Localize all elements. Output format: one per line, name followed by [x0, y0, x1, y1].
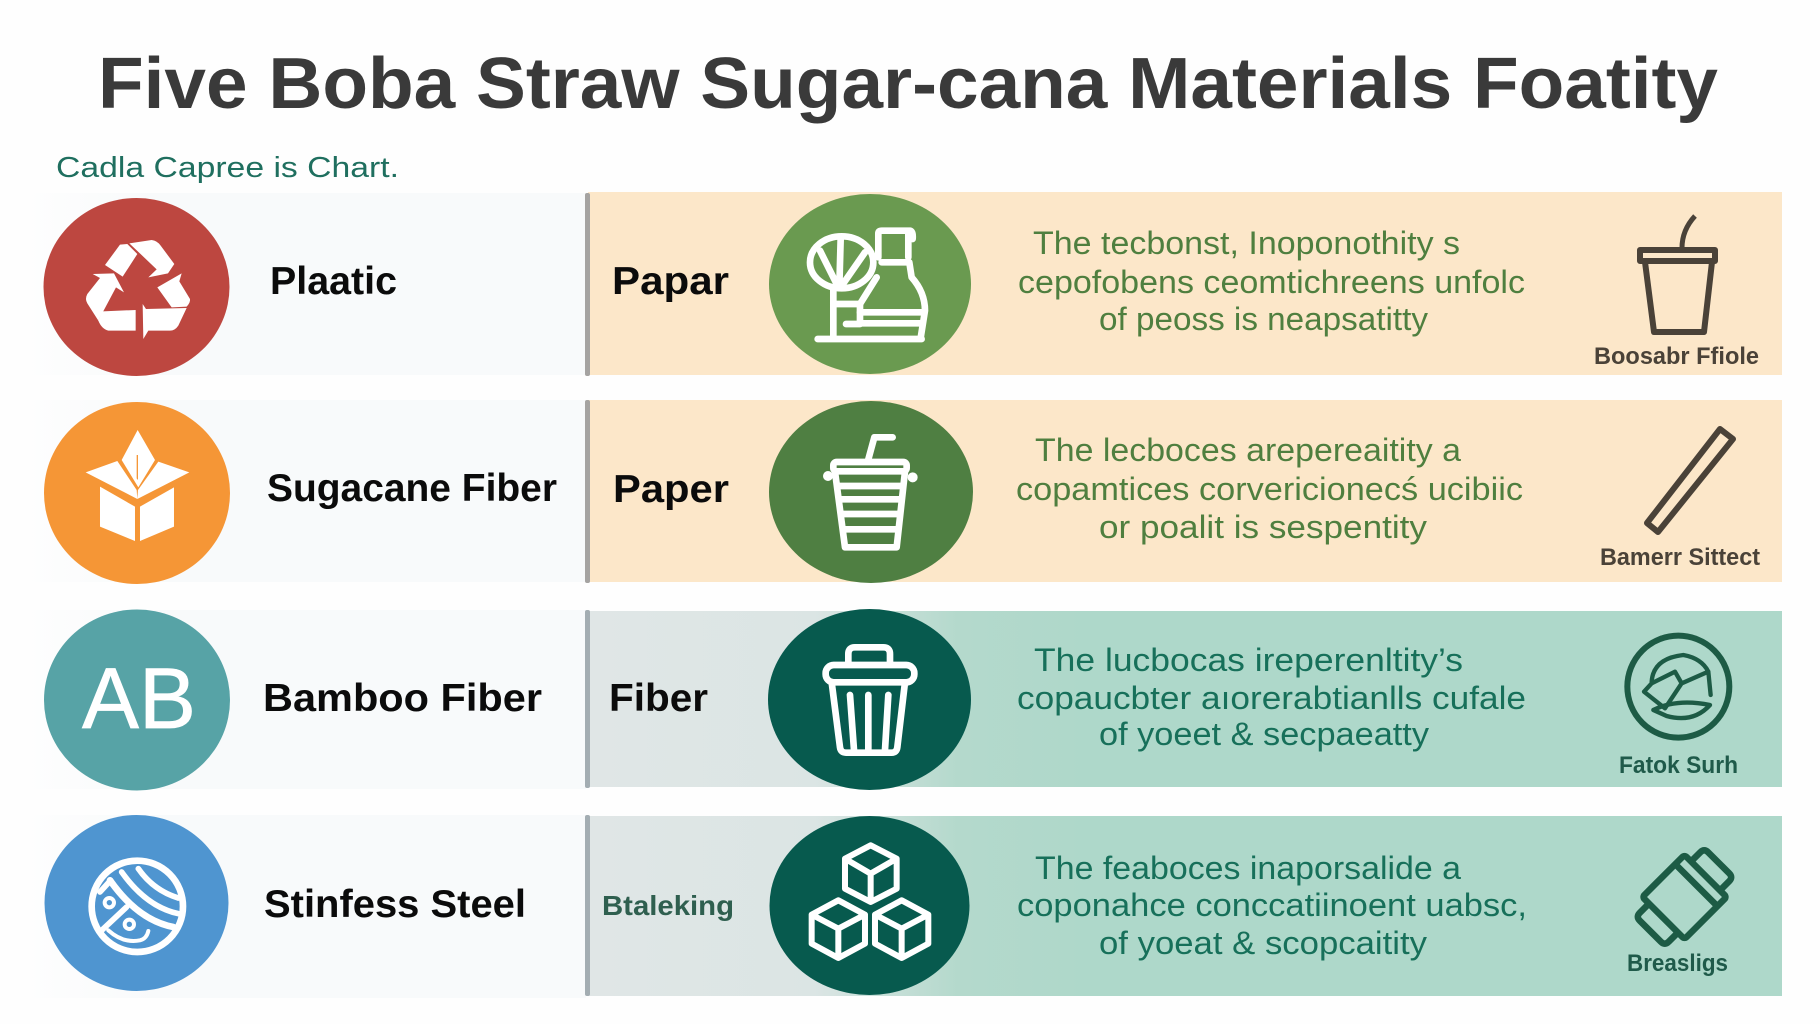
description text [1017, 642, 1526, 752]
description text: or poalit is sespentity [1099, 509, 1427, 545]
row 3 left panel [20, 610, 586, 789]
description text [1017, 850, 1527, 961]
description text: of peoss is neapsatitty [1099, 301, 1428, 337]
description text: of yoeet & secpaeatty [1099, 716, 1429, 752]
icon: cup with straw [1640, 216, 1715, 332]
material label: Sugacane Fiber: Sugacane Fiber [267, 467, 557, 510]
icon: leaf badge [1627, 636, 1729, 738]
description text: coponahce conccatiinoent uabsc, [1017, 887, 1527, 923]
description text: copamtices corvericionecś ucibiic [1016, 471, 1523, 507]
row 3 right panel [588, 611, 1782, 787]
row 4: stainless steel [20, 815, 1782, 998]
type label: Paper: Paper [613, 468, 729, 511]
icon: drink cup in green circle [769, 401, 973, 583]
description text: The lucbocas ireperenltity’s [1034, 642, 1463, 678]
description text [1018, 225, 1525, 337]
icon: straw [1647, 429, 1733, 532]
row 4 divider [585, 815, 590, 996]
material label: Bamboo Fiber: Bamboo Fiber [263, 677, 542, 720]
type label: Papar: Papar [612, 260, 729, 303]
row 2: sugarcane fiber and paper [20, 400, 1782, 584]
description text: The feaboces inaporsalide a [1035, 850, 1461, 886]
icon: AB in teal circle: AB [82, 651, 196, 747]
icon: wrapped bundle [1629, 842, 1740, 952]
material label: Plaatic: Plaatic [270, 260, 397, 303]
description text: copaucbter aıorerabtianlls cufale [1017, 680, 1526, 716]
title: Five Boba Straw Sugar-cana Materials Foatity [98, 44, 1718, 124]
row 1 left panel [20, 193, 586, 375]
icon: recycle in red circle [44, 198, 230, 376]
caption: Breasligs: Breasligs [1627, 950, 1728, 977]
caption: Bamerr Sittect: Bamerr Sittect [1600, 544, 1760, 571]
row 1: plastic and paper [20, 192, 1782, 376]
row 3 divider [585, 610, 590, 788]
row 2 divider [585, 400, 590, 583]
row 4 right panel [588, 816, 1782, 996]
caption: Fatok Surh: Fatok Surh [1619, 752, 1738, 779]
row 2 left panel [20, 400, 586, 582]
description text [1016, 432, 1523, 545]
description text: of yoeat & scopcaitity [1099, 925, 1427, 961]
subtitle: Cadla Capree is Chart. [56, 152, 399, 184]
description text: The lecboces arepereaitity a [1035, 432, 1461, 468]
row 2 right panel [588, 400, 1782, 582]
icon: plant and bottle in green circle [769, 194, 971, 374]
row 4 left panel [20, 815, 586, 998]
row 1 divider [585, 193, 590, 376]
icon: trash can in dark teal circle [768, 609, 971, 790]
row 3: bamboo fiber [20, 609, 1782, 790]
type label: Btaleking: Btaleking [602, 890, 734, 921]
type label: Fiber: Fiber [609, 677, 708, 720]
description text: cepofobens ceomtichreens unfolc [1018, 264, 1525, 300]
icon: box with leaf in orange circle [44, 402, 230, 584]
icon: AB in teal circle [44, 610, 230, 790]
material label: Stinfess Steel: Stinfess Steel [264, 883, 526, 926]
caption: Boosabr Ffiole: Boosabr Ffiole [1594, 343, 1759, 370]
icon: woven globe in blue circle [44, 815, 228, 991]
description text: The tecbonst, Inoponothity s [1033, 225, 1460, 261]
icon: three cubes in dark teal circle [770, 816, 970, 995]
row 1 right panel [588, 192, 1782, 375]
